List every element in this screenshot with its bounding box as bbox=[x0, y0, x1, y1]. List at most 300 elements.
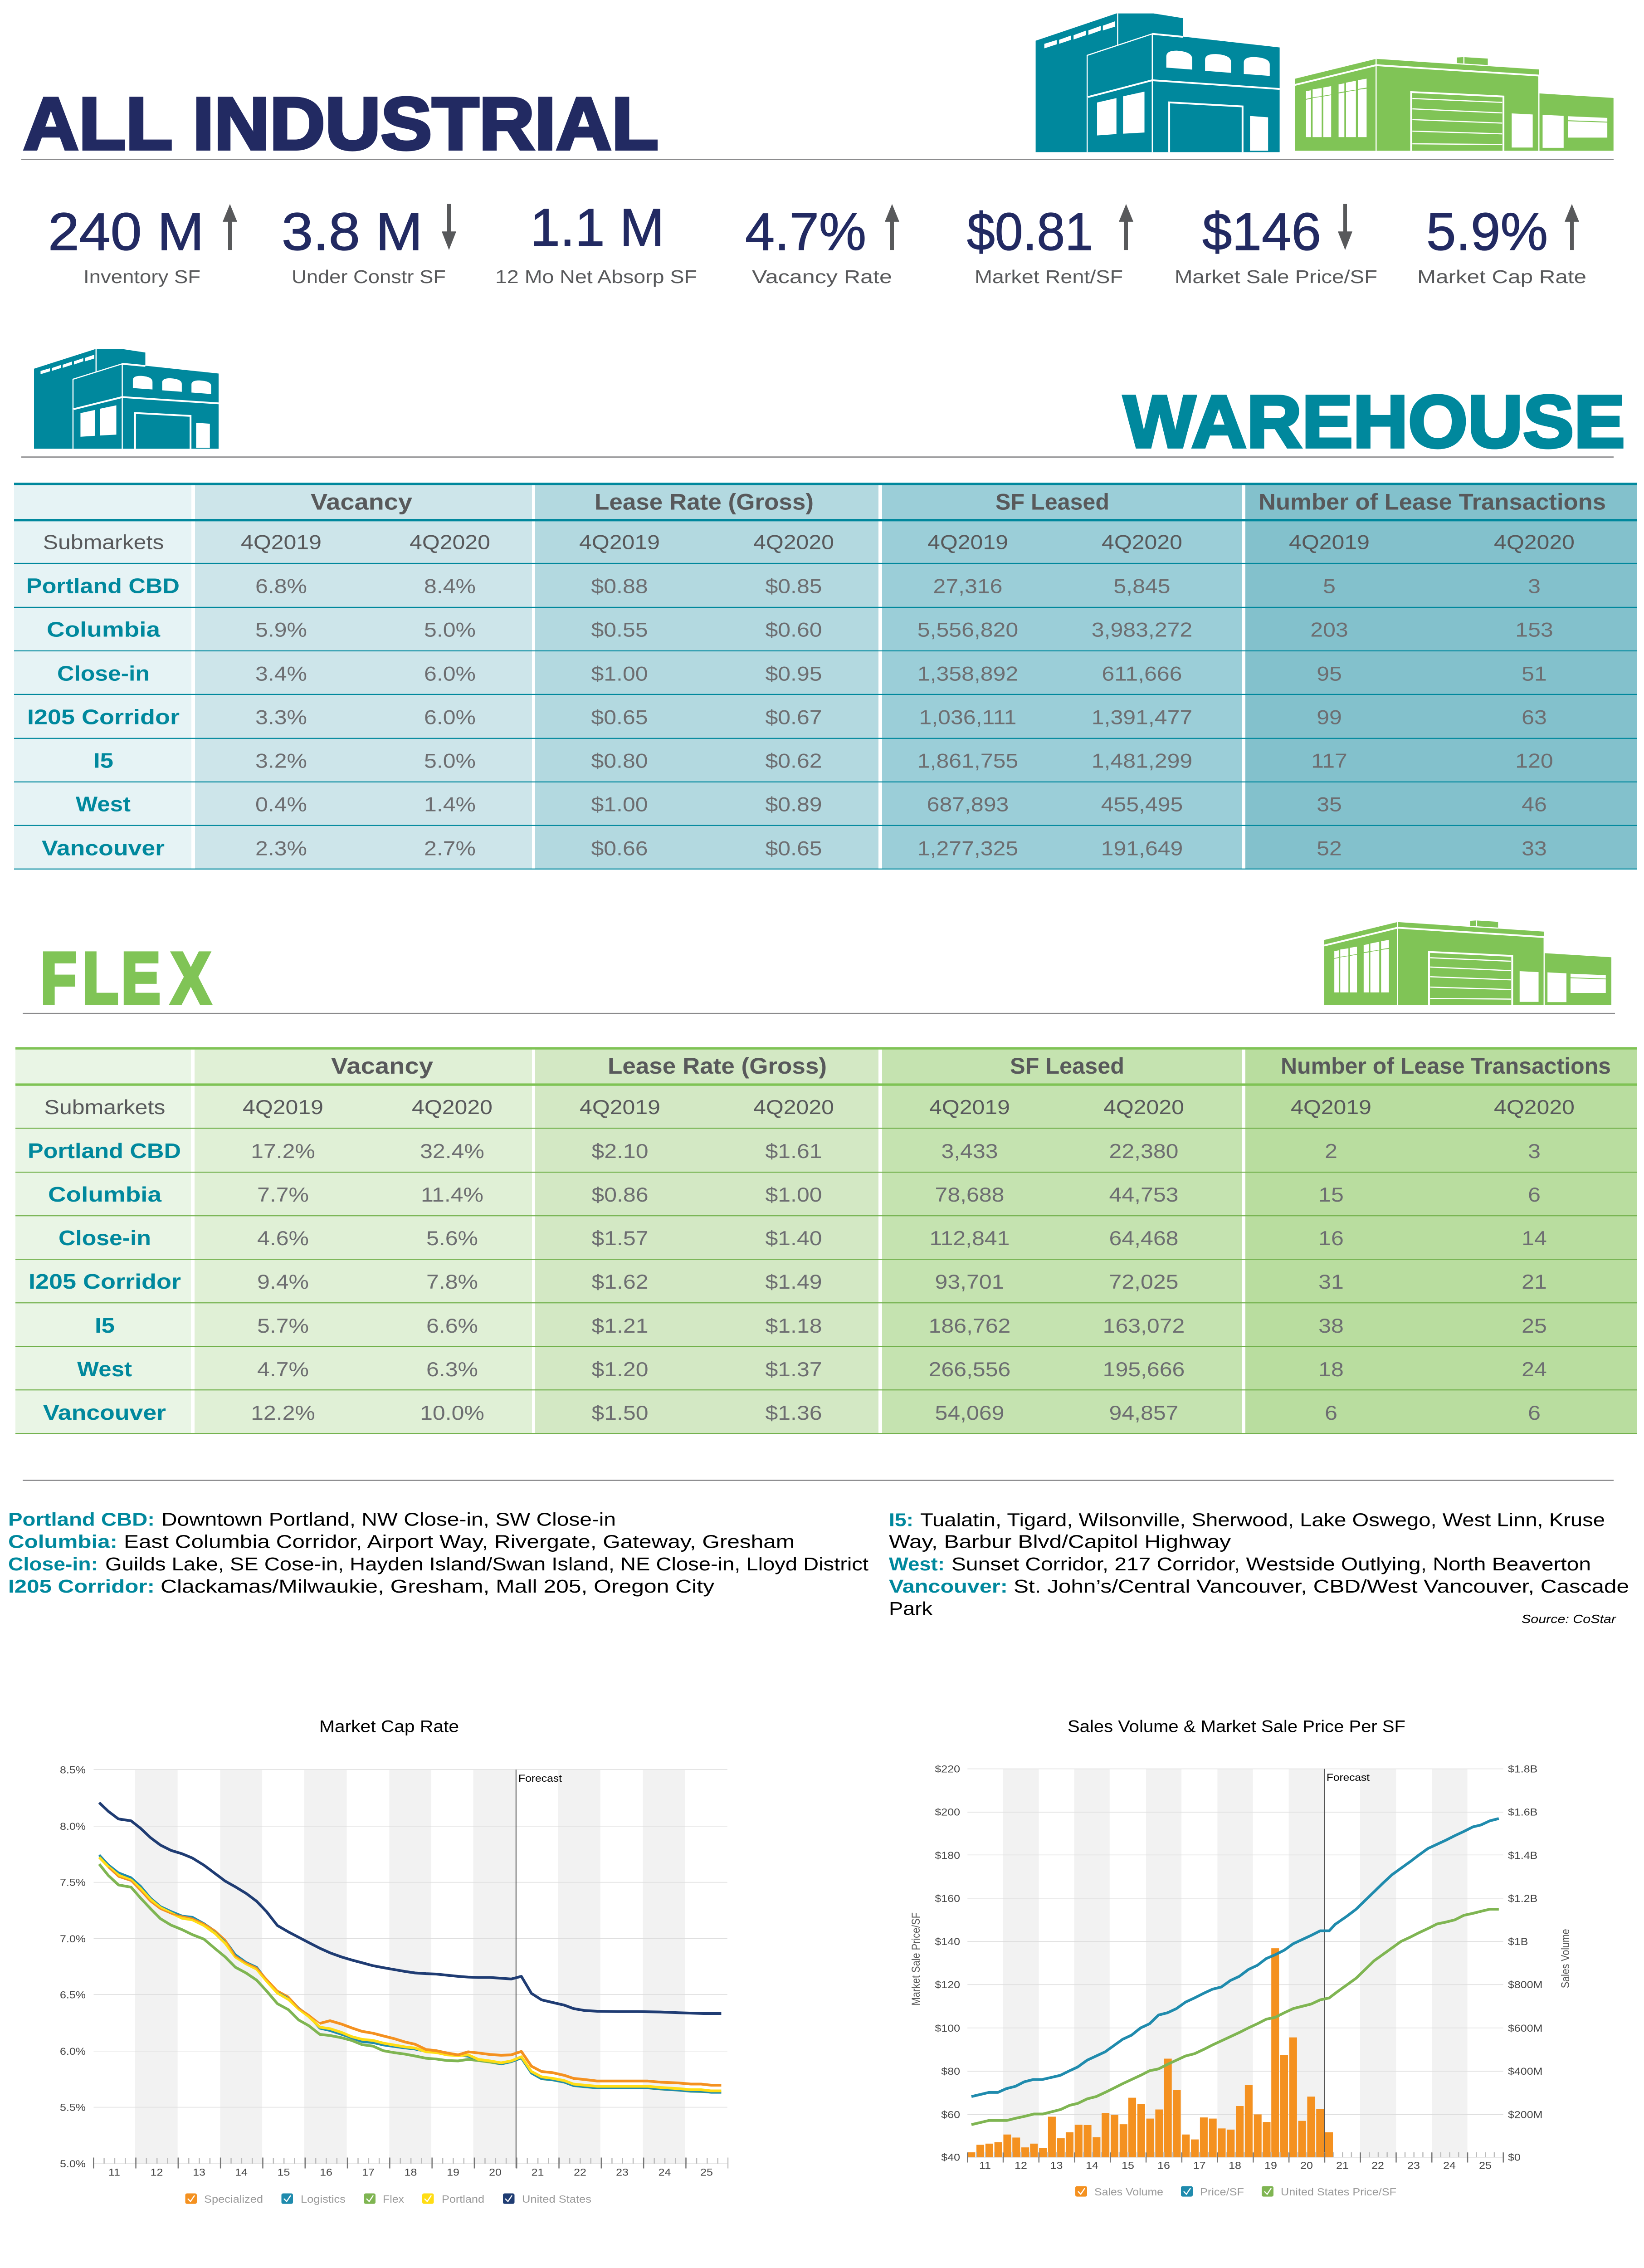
x axis labels: 15 bbox=[1122, 2160, 1134, 2171]
left axis labels: $60 bbox=[941, 2110, 960, 2121]
stat: vacancy rate: 4.7% bbox=[745, 202, 866, 261]
flex group headers: Lease Rate (Gross) bbox=[608, 1054, 827, 1079]
icon: green flex building bbox=[1295, 57, 1614, 151]
arrow: vacancy up bbox=[885, 204, 899, 250]
stat: market rent bbox=[967, 202, 1123, 287]
table column headers bbox=[43, 531, 1575, 554]
flex row: I5: 38 bbox=[1318, 1315, 1344, 1337]
legend: Price/SF bbox=[1200, 2186, 1244, 2198]
chart title: Sales Volume & Market Sale Price Per SF bbox=[1068, 1717, 1405, 1736]
series: logistics bbox=[99, 1855, 721, 2092]
table column headers: 4Q2019 bbox=[927, 531, 1008, 554]
row: Vancouver: 1,277,325 bbox=[917, 837, 1018, 860]
stat: market sale price: Market Sale Price/SF bbox=[1175, 267, 1377, 287]
flex row: Vancouver: 54,069 bbox=[935, 1402, 1004, 1424]
flex row: I205 Corridor: 7.8% bbox=[426, 1271, 478, 1293]
arrow: rent up bbox=[1119, 204, 1133, 250]
flex row: I205 Corridor bbox=[29, 1270, 1547, 1293]
icon: flex section building bbox=[1324, 920, 1611, 1005]
stat: market sale price bbox=[1175, 202, 1377, 287]
x axis labels: 15 bbox=[278, 2167, 290, 2178]
row: I205 Corridor: 99 bbox=[1317, 706, 1342, 729]
x axis labels: 19 bbox=[447, 2167, 459, 2178]
left axis labels: $120 bbox=[935, 1980, 960, 1991]
y axis labels bbox=[60, 1765, 86, 2170]
y axis labels: 5.0% bbox=[60, 2159, 86, 2170]
x axis labels: 16 bbox=[1157, 2160, 1170, 2171]
flex row: I5: $1.21 bbox=[591, 1315, 649, 1337]
flex group headers: Vacancy bbox=[331, 1054, 434, 1079]
flex row: Columbia bbox=[48, 1183, 1541, 1206]
y axis labels: 8.5% bbox=[60, 1765, 86, 1776]
row: Columbia bbox=[47, 618, 1553, 641]
flex group headers: SF Leased bbox=[1010, 1054, 1124, 1079]
icon: warehouse section building bbox=[34, 349, 219, 449]
x axis labels: 17 bbox=[362, 2167, 375, 2178]
stat: market sale price: $146 bbox=[1202, 202, 1321, 261]
flex row: I5: 5.7% bbox=[257, 1315, 309, 1337]
row: I5: 5.0% bbox=[424, 750, 476, 772]
flex row: I205 Corridor: $1.62 bbox=[591, 1271, 649, 1293]
row: West bbox=[76, 792, 1547, 816]
x axis labels: 23 bbox=[616, 2167, 629, 2178]
flex row: West: $1.20 bbox=[591, 1358, 649, 1381]
flex row: I205 Corridor: 72,025 bbox=[1109, 1271, 1178, 1293]
flex row: Close-in: $1.57 bbox=[591, 1227, 649, 1250]
flex row: Columbia: 78,688 bbox=[935, 1183, 1004, 1206]
chart: sales volume and market sale price bbox=[910, 1717, 1572, 2198]
flex row: Vancouver: 10.0% bbox=[420, 1402, 484, 1424]
flex row: Vancouver: 12.2% bbox=[251, 1402, 315, 1424]
flex row: I5: $1.18 bbox=[765, 1315, 822, 1337]
heading: flex: FLEX bbox=[41, 938, 210, 1018]
stat: cap rate: Market Cap Rate bbox=[1417, 267, 1586, 287]
stat: inventory: Inventory SF bbox=[83, 267, 200, 287]
text block: submarket definitions right bbox=[889, 1510, 1629, 1619]
flex row: I5: 6.6% bbox=[426, 1315, 478, 1337]
flex row: Close-in: $1.40 bbox=[765, 1227, 822, 1250]
axis ticks bbox=[967, 2155, 1504, 2157]
row: West: 35 bbox=[1317, 793, 1342, 816]
row: Vancouver: 2.7% bbox=[424, 837, 476, 860]
flex row: West bbox=[77, 1357, 1547, 1381]
source note: Source: CoStar bbox=[1522, 1612, 1617, 1625]
row: I205 Corridor: 1,036,111 bbox=[919, 706, 1016, 729]
plot: bands, gridlines and lines bbox=[93, 1769, 727, 2168]
text block: submarket definitions left: Downtown Portland, NW Close-in, SW Close-in bbox=[161, 1510, 616, 1530]
row: Close-in: 6.0% bbox=[424, 663, 476, 685]
row: I205 Corridor: 63 bbox=[1522, 706, 1547, 729]
left axis labels: $180 bbox=[935, 1850, 960, 1861]
x axis labels: 22 bbox=[574, 2167, 586, 2178]
row: Columbia: 203 bbox=[1310, 619, 1348, 641]
flex row: Portland CBD: 22,380 bbox=[1109, 1140, 1178, 1163]
flex row: Vancouver: 6 bbox=[1325, 1402, 1337, 1424]
flex row: Vancouver bbox=[43, 1401, 1541, 1424]
text block: submarket definitions right: Sunset Corridor, 217 Corridor, Westside Outlying, North Beaverton bbox=[951, 1554, 1591, 1575]
legend: Logistics bbox=[301, 2194, 346, 2205]
series: specialized bbox=[320, 2021, 721, 2085]
text block: submarket definitions left: I205 Corridor: bbox=[8, 1576, 155, 1597]
flex row: I205 Corridor: I205 Corridor bbox=[29, 1270, 181, 1293]
y axis labels: 5.5% bbox=[60, 2102, 86, 2113]
stat row bbox=[48, 198, 1586, 287]
row: I5: 3.2% bbox=[255, 750, 307, 772]
x axis labels: 25 bbox=[1479, 2160, 1492, 2171]
x axis labels: 20 bbox=[1300, 2160, 1313, 2171]
x axis labels: 13 bbox=[1050, 2160, 1063, 2171]
left axis labels: $140 bbox=[935, 1936, 960, 1948]
flex row: West: $1.37 bbox=[765, 1358, 822, 1381]
flex column headers: 4Q2019 bbox=[1291, 1096, 1371, 1119]
left axis labels bbox=[935, 1764, 960, 2163]
flex column headers: 4Q2019 bbox=[580, 1096, 660, 1119]
stat: inventory: 240 M bbox=[48, 202, 204, 261]
stat: under construction: 3.8 M bbox=[282, 202, 423, 261]
flex row: Columbia: $0.86 bbox=[591, 1183, 649, 1206]
row: Columbia: 3,983,272 bbox=[1092, 619, 1192, 641]
right axis labels: $1B bbox=[1508, 1936, 1528, 1948]
stat: net absorption: 1.1 M bbox=[530, 198, 664, 257]
chart title: Market Cap Rate bbox=[319, 1717, 459, 1736]
row: Columbia: 5.9% bbox=[255, 619, 307, 641]
x axis labels: 18 bbox=[1229, 2160, 1241, 2171]
arrow: sale price down bbox=[1338, 204, 1352, 250]
stat: under construction bbox=[282, 202, 446, 287]
row: Vancouver: 52 bbox=[1317, 837, 1342, 860]
table column headers: 4Q2020 bbox=[1494, 531, 1575, 554]
table group headers: Number of Lease Transactions bbox=[1259, 489, 1606, 515]
row: Close-in: $0.95 bbox=[765, 663, 822, 685]
row: Close-in: 51 bbox=[1522, 663, 1547, 685]
stat: vacancy rate: Vacancy Rate bbox=[752, 267, 892, 287]
legend bbox=[185, 2194, 591, 2205]
flex row: Portland CBD: 3 bbox=[1528, 1140, 1541, 1163]
left axis labels: $40 bbox=[941, 2152, 960, 2163]
row: Vancouver bbox=[42, 836, 1547, 860]
x axis labels: 24 bbox=[1443, 2160, 1456, 2171]
flex column headers: 4Q2019 bbox=[243, 1096, 323, 1119]
x axis labels: 17 bbox=[1193, 2160, 1205, 2171]
row: I5: I5 bbox=[93, 749, 113, 772]
x axis labels: 12 bbox=[1015, 2160, 1027, 2171]
y axis labels: 7.5% bbox=[60, 1877, 86, 1888]
row: I205 Corridor bbox=[27, 705, 1547, 729]
row: Close-in: Close-in bbox=[57, 662, 150, 685]
flex row: Columbia: Columbia bbox=[48, 1183, 162, 1206]
x axis labels: 21 bbox=[1336, 2160, 1349, 2171]
flex row: Portland CBD: $2.10 bbox=[591, 1140, 649, 1163]
row: Portland CBD: Portland CBD bbox=[26, 574, 180, 598]
left axis labels: $160 bbox=[935, 1893, 960, 1905]
stat: cap rate: 5.9% bbox=[1426, 202, 1548, 261]
row: Portland CBD: 8.4% bbox=[424, 575, 476, 598]
row: I205 Corridor: 6.0% bbox=[424, 706, 476, 729]
row: West: West bbox=[76, 792, 131, 816]
row: I5: $0.80 bbox=[591, 750, 648, 772]
row: I205 Corridor: 3.3% bbox=[255, 706, 307, 729]
row: I205 Corridor: $0.65 bbox=[591, 706, 648, 729]
arrow: under construction down bbox=[442, 204, 456, 250]
table group headers: Vacancy bbox=[311, 489, 413, 515]
row: West: 1.4% bbox=[424, 793, 476, 816]
flex row: Portland CBD: Portland CBD bbox=[28, 1139, 181, 1163]
right axis labels: $1.8B bbox=[1508, 1764, 1537, 1775]
flex row: West: 195,666 bbox=[1103, 1358, 1185, 1381]
x axis labels: 11 bbox=[979, 2160, 991, 2171]
flex row: Vancouver: Vancouver bbox=[43, 1401, 166, 1424]
table column headers: 4Q2019 bbox=[579, 531, 660, 554]
legend bbox=[1075, 2186, 1396, 2198]
left axis labels: $200 bbox=[935, 1807, 960, 1818]
x axis labels: 25 bbox=[700, 2167, 713, 2178]
text block: submarket definitions left: Close-in: bbox=[8, 1554, 98, 1575]
row: Vancouver: $0.65 bbox=[765, 837, 822, 860]
series: price per sf bbox=[971, 1818, 1499, 2097]
row: I5: 1,481,299 bbox=[1092, 750, 1192, 772]
flex row: West: 18 bbox=[1318, 1358, 1344, 1381]
panel: flex table bbox=[15, 1047, 1637, 1434]
flex row: Close-in: 16 bbox=[1318, 1227, 1344, 1250]
flex column headers: 4Q2020 bbox=[1494, 1096, 1575, 1119]
x axis labels: 20 bbox=[489, 2167, 502, 2178]
flex column headers: 4Q2020 bbox=[753, 1096, 834, 1119]
row: West: 687,893 bbox=[927, 793, 1009, 816]
row: Vancouver: 191,649 bbox=[1101, 837, 1183, 860]
text block: submarket definitions right: Tualatin, Tigard, Wilsonville, Sherwood, Lake Oswego, West Linn, Kruse bbox=[920, 1510, 1605, 1530]
text block: submarket definitions left bbox=[8, 1510, 868, 1597]
flex row: Portland CBD: 2 bbox=[1325, 1140, 1337, 1163]
flex row: Close-in: 14 bbox=[1522, 1227, 1547, 1250]
flex row: I5: 186,762 bbox=[929, 1315, 1010, 1337]
row: Close-in: 95 bbox=[1317, 663, 1342, 685]
table column headers: 4Q2019 bbox=[1289, 531, 1370, 554]
right axis labels: $1.2B bbox=[1508, 1893, 1537, 1905]
flex column headers: 4Q2020 bbox=[1103, 1096, 1184, 1119]
row: West: 46 bbox=[1522, 793, 1547, 816]
flex row: West: 24 bbox=[1522, 1358, 1547, 1381]
text block: submarket definitions left: Columbia: bbox=[8, 1532, 117, 1552]
flex row: Columbia: 15 bbox=[1318, 1183, 1344, 1206]
x axis labels: 24 bbox=[659, 2167, 671, 2178]
flex column headers: 4Q2019 bbox=[929, 1096, 1010, 1119]
series: united states bbox=[99, 1803, 721, 2014]
series: portland bbox=[99, 1857, 721, 2091]
flex row: I205 Corridor: 31 bbox=[1318, 1271, 1344, 1293]
legend: Specialized bbox=[204, 2194, 263, 2205]
x axis labels: 23 bbox=[1407, 2160, 1420, 2171]
row: I5 bbox=[93, 749, 1553, 772]
table column headers: Submarkets bbox=[43, 531, 164, 554]
table column headers: 4Q2020 bbox=[753, 531, 834, 554]
flex row: Columbia: 11.4% bbox=[421, 1183, 483, 1206]
row: Close-in: 611,666 bbox=[1102, 663, 1182, 685]
flex row: Close-in: 64,468 bbox=[1109, 1227, 1178, 1250]
right axis title: Sales Volume bbox=[1560, 1929, 1572, 1988]
row: Vancouver: Vancouver bbox=[42, 836, 165, 860]
table group headers: SF Leased bbox=[995, 489, 1109, 515]
text block: submarket definitions left: East Columbia Corridor, Airport Way, Rivergate, Gateway, Gresham bbox=[124, 1532, 795, 1552]
x axis labels: 21 bbox=[532, 2167, 544, 2178]
right axis labels: $400M bbox=[1508, 2066, 1542, 2077]
legend: United States bbox=[522, 2194, 591, 2205]
flex row: West: West bbox=[77, 1357, 132, 1381]
text block: submarket definitions right: Vancouver: bbox=[889, 1576, 1008, 1597]
row: Columbia: 5,556,820 bbox=[917, 619, 1018, 641]
row: I5: $0.62 bbox=[765, 750, 822, 772]
legend: Flex bbox=[383, 2194, 405, 2205]
row: I205 Corridor: $0.67 bbox=[765, 706, 822, 729]
row: I5: 117 bbox=[1311, 750, 1347, 772]
flex row: I5 bbox=[95, 1314, 1547, 1337]
stat: vacancy rate bbox=[745, 202, 892, 287]
row: Vancouver: 2.3% bbox=[255, 837, 307, 860]
row: Columbia: Columbia bbox=[47, 618, 161, 641]
x axis labels: 14 bbox=[1086, 2160, 1098, 2171]
y axis labels: 6.0% bbox=[60, 2046, 86, 2057]
y axis labels: 8.0% bbox=[60, 1821, 86, 1832]
panel: warehouse table bbox=[14, 483, 1637, 870]
flex row: Close-in: 4.6% bbox=[257, 1227, 309, 1250]
flex group headers: Number of Lease Transactions bbox=[1281, 1054, 1611, 1079]
forecast label: Forecast bbox=[1327, 1772, 1370, 1784]
table column headers: 4Q2020 bbox=[410, 531, 490, 554]
stat: cap rate bbox=[1417, 202, 1586, 287]
flex row: Columbia: 44,753 bbox=[1109, 1183, 1178, 1206]
series: united states price per sf bbox=[971, 1909, 1499, 2125]
x axis labels: 11 bbox=[108, 2167, 120, 2178]
flex group headers bbox=[331, 1054, 1611, 1079]
flex row: West: 4.7% bbox=[257, 1358, 309, 1381]
row: Columbia: $0.60 bbox=[765, 619, 822, 641]
text block: submarket definitions right: West: bbox=[889, 1554, 945, 1575]
row: Close-in: $1.00 bbox=[591, 663, 648, 685]
stat: net absorption bbox=[495, 198, 697, 287]
row: Close-in: 3.4% bbox=[255, 663, 307, 685]
row: West: 455,495 bbox=[1101, 793, 1183, 816]
flex row: I205 Corridor: 9.4% bbox=[257, 1271, 309, 1293]
forecast label: Forecast bbox=[518, 1773, 562, 1784]
right axis labels: $800M bbox=[1508, 1980, 1542, 1991]
flex row: Columbia: $1.00 bbox=[765, 1183, 822, 1206]
arrow: cap rate up bbox=[1565, 204, 1579, 250]
x axis labels: 18 bbox=[405, 2167, 417, 2178]
title: All Industrial: ALL INDUSTRIAL bbox=[23, 82, 659, 165]
row: Portland CBD bbox=[26, 574, 1541, 598]
flex row: West: 6.3% bbox=[426, 1358, 478, 1381]
x axis labels: 19 bbox=[1264, 2160, 1277, 2171]
text block: submarket definitions left: Guilds Lake, SE Cose-in, Hayden Island/Swan Island, NE Close-in, Lloyd District bbox=[105, 1554, 868, 1575]
right axis labels: $1.4B bbox=[1508, 1850, 1537, 1861]
right axis labels: $0 bbox=[1508, 2152, 1521, 2163]
legend: Sales Volume bbox=[1094, 2186, 1163, 2198]
left axis labels: $100 bbox=[935, 2023, 960, 2034]
stat: inventory bbox=[48, 202, 204, 287]
row: I205 Corridor: 1,391,477 bbox=[1092, 706, 1192, 729]
row: West: 0.4% bbox=[255, 793, 307, 816]
row: Columbia: $0.55 bbox=[591, 619, 648, 641]
row: Portland CBD: 3 bbox=[1528, 575, 1541, 598]
row: Portland CBD: 27,316 bbox=[933, 575, 1002, 598]
left axis title: Market Sale Price/SF bbox=[910, 1912, 922, 2005]
flex row: I205 Corridor: 93,701 bbox=[935, 1271, 1004, 1293]
flex row: Close-in: Close-in bbox=[59, 1227, 151, 1250]
stat: market rent: $0.81 bbox=[967, 202, 1093, 261]
flex row: Portland CBD: 32.4% bbox=[420, 1140, 484, 1163]
right axis labels: $200M bbox=[1508, 2110, 1542, 2121]
y axis labels: 7.0% bbox=[60, 1934, 86, 1945]
row: I5: 120 bbox=[1515, 750, 1553, 772]
icon: teal warehouse building bbox=[1036, 14, 1280, 152]
chart: market cap rate bbox=[60, 1717, 728, 2205]
x axis labels: 22 bbox=[1371, 2160, 1384, 2171]
text block: submarket definitions left: Clackamas/Milwaukie, Gresham, Mall 205, Oregon City bbox=[161, 1576, 714, 1597]
text block: submarket definitions left: Portland CBD: bbox=[8, 1510, 155, 1530]
left axis labels: $80 bbox=[941, 2066, 960, 2077]
flex column headers: 4Q2020 bbox=[412, 1096, 493, 1119]
row: Vancouver: 33 bbox=[1522, 837, 1547, 860]
flex row: Vancouver: $1.36 bbox=[765, 1402, 822, 1424]
x axis labels: 16 bbox=[320, 2167, 332, 2178]
legend: United States Price/SF bbox=[1281, 2186, 1396, 2198]
row: Close-in bbox=[57, 662, 1547, 685]
flex row: Vancouver: $1.50 bbox=[591, 1402, 649, 1424]
row: West: $1.00 bbox=[591, 793, 648, 816]
flex row: I5: 25 bbox=[1522, 1315, 1547, 1337]
table column headers: 4Q2019 bbox=[241, 531, 322, 554]
bars: sales volume bbox=[967, 1948, 1333, 2157]
flex row: Columbia: 6 bbox=[1528, 1183, 1541, 1206]
row: Columbia: 5.0% bbox=[424, 619, 476, 641]
x axis labels: 14 bbox=[235, 2167, 248, 2178]
right axis labels: $1.6B bbox=[1508, 1807, 1537, 1818]
table column headers: 4Q2020 bbox=[1102, 531, 1182, 554]
flex row: Close-in: 5.6% bbox=[426, 1227, 478, 1250]
flex row: Portland CBD: 3,433 bbox=[941, 1140, 998, 1163]
y axis labels: 6.5% bbox=[60, 1990, 86, 2001]
row: Portland CBD: 5,845 bbox=[1113, 575, 1171, 598]
row: I5: 1,861,755 bbox=[917, 750, 1018, 772]
flex row: Portland CBD: $1.61 bbox=[765, 1140, 822, 1163]
flex column headers: Submarkets bbox=[44, 1096, 165, 1119]
left axis labels: $220 bbox=[935, 1764, 960, 1775]
stat: net absorption: 12 Mo Net Absorp SF bbox=[495, 267, 697, 287]
plot: bands, gridlines, bars and lines bbox=[967, 1769, 1503, 2163]
row: Close-in: 1,358,892 bbox=[917, 663, 1018, 685]
x axis labels bbox=[108, 2167, 713, 2178]
row: West: $0.89 bbox=[765, 793, 822, 816]
table group headers bbox=[311, 489, 1606, 515]
right axis labels bbox=[1508, 1764, 1542, 2163]
flex row: I5: 163,072 bbox=[1103, 1315, 1185, 1337]
row: Portland CBD: 6.8% bbox=[255, 575, 307, 598]
flex row: Columbia: 7.7% bbox=[257, 1183, 309, 1206]
row: Portland CBD: 5 bbox=[1323, 575, 1336, 598]
legend: Portland bbox=[442, 2194, 484, 2205]
flex row: Vancouver: 94,857 bbox=[1109, 1402, 1178, 1424]
flex row: I205 Corridor: 21 bbox=[1522, 1271, 1547, 1293]
axis ticks bbox=[93, 2161, 728, 2163]
flex row: Portland CBD: 17.2% bbox=[251, 1140, 315, 1163]
right axis labels: $600M bbox=[1508, 2023, 1542, 2034]
row: Portland CBD: $0.85 bbox=[765, 575, 822, 598]
text block: submarket definitions right: I5: bbox=[889, 1510, 913, 1530]
flex row: I205 Corridor: $1.49 bbox=[765, 1271, 822, 1293]
flex row: Close-in bbox=[59, 1227, 1547, 1250]
stat: under construction: Under Constr SF bbox=[292, 267, 446, 287]
x axis labels: 13 bbox=[193, 2167, 205, 2178]
stat: market rent: Market Rent/SF bbox=[975, 267, 1123, 287]
